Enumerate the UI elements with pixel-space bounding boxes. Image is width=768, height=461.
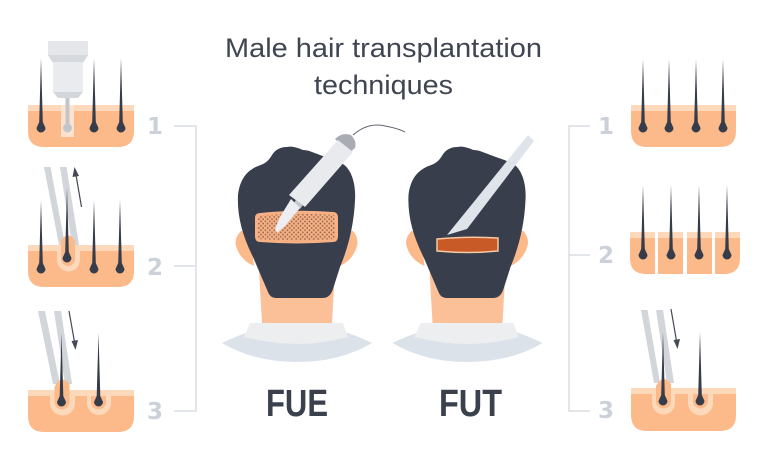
label: FUE: FUE — [266, 383, 328, 425]
icon: FUE punch device — [275, 125, 405, 233]
panel: FUE step 3 — [28, 311, 134, 432]
arrow: down — [671, 309, 680, 349]
hair — [408, 147, 526, 298]
icon: forceps — [38, 311, 72, 384]
label: FUT: FUT — [439, 383, 502, 425]
hairs — [638, 59, 728, 132]
hairs — [658, 332, 704, 406]
icon: scalpel — [447, 135, 534, 235]
shoulders — [222, 331, 372, 362]
skin — [631, 105, 736, 147]
skin segments — [630, 232, 740, 274]
skin — [28, 390, 134, 432]
step number 3: 3 — [147, 399, 163, 425]
arrow: up — [72, 167, 82, 207]
panel: FUE step 2 — [28, 167, 134, 287]
hairs — [57, 333, 103, 406]
step number 2: 2 — [147, 255, 163, 281]
panel: FUE head — [222, 125, 405, 362]
icon: forceps — [44, 167, 79, 245]
panel: FUE step 1 — [28, 41, 134, 147]
step number 1: 1 — [147, 114, 163, 140]
step number 1: 1 — [598, 114, 614, 140]
ears — [236, 231, 254, 266]
icon: extraction device — [48, 41, 88, 132]
hairs — [36, 58, 126, 132]
hair — [238, 147, 355, 298]
shoulders — [392, 331, 542, 362]
collar — [414, 323, 518, 344]
hairs — [36, 188, 124, 274]
bracket: FUE steps — [174, 126, 196, 411]
step number 2: 2 — [598, 243, 614, 269]
collar — [244, 323, 348, 344]
arrow: down — [69, 311, 78, 350]
patch: donor area — [255, 211, 338, 244]
hairs — [638, 185, 732, 260]
bracket: FUT steps — [569, 126, 590, 411]
title: techniques — [314, 70, 453, 100]
icon: forceps — [641, 310, 674, 383]
skin — [631, 388, 736, 431]
panel: FUT head — [392, 147, 542, 362]
title: Male hair transplantation — [225, 33, 542, 63]
panel: FUT step 3 — [631, 309, 736, 431]
panel: FUT step 1 — [631, 59, 736, 147]
step number 3: 3 — [598, 398, 614, 424]
skin — [28, 245, 134, 287]
neck — [259, 270, 335, 323]
ears — [406, 231, 424, 266]
neck — [430, 270, 506, 323]
patch: FUT strip — [437, 237, 498, 252]
title — [225, 33, 542, 100]
skin — [28, 105, 134, 147]
panel: FUT step 2 — [630, 185, 740, 274]
